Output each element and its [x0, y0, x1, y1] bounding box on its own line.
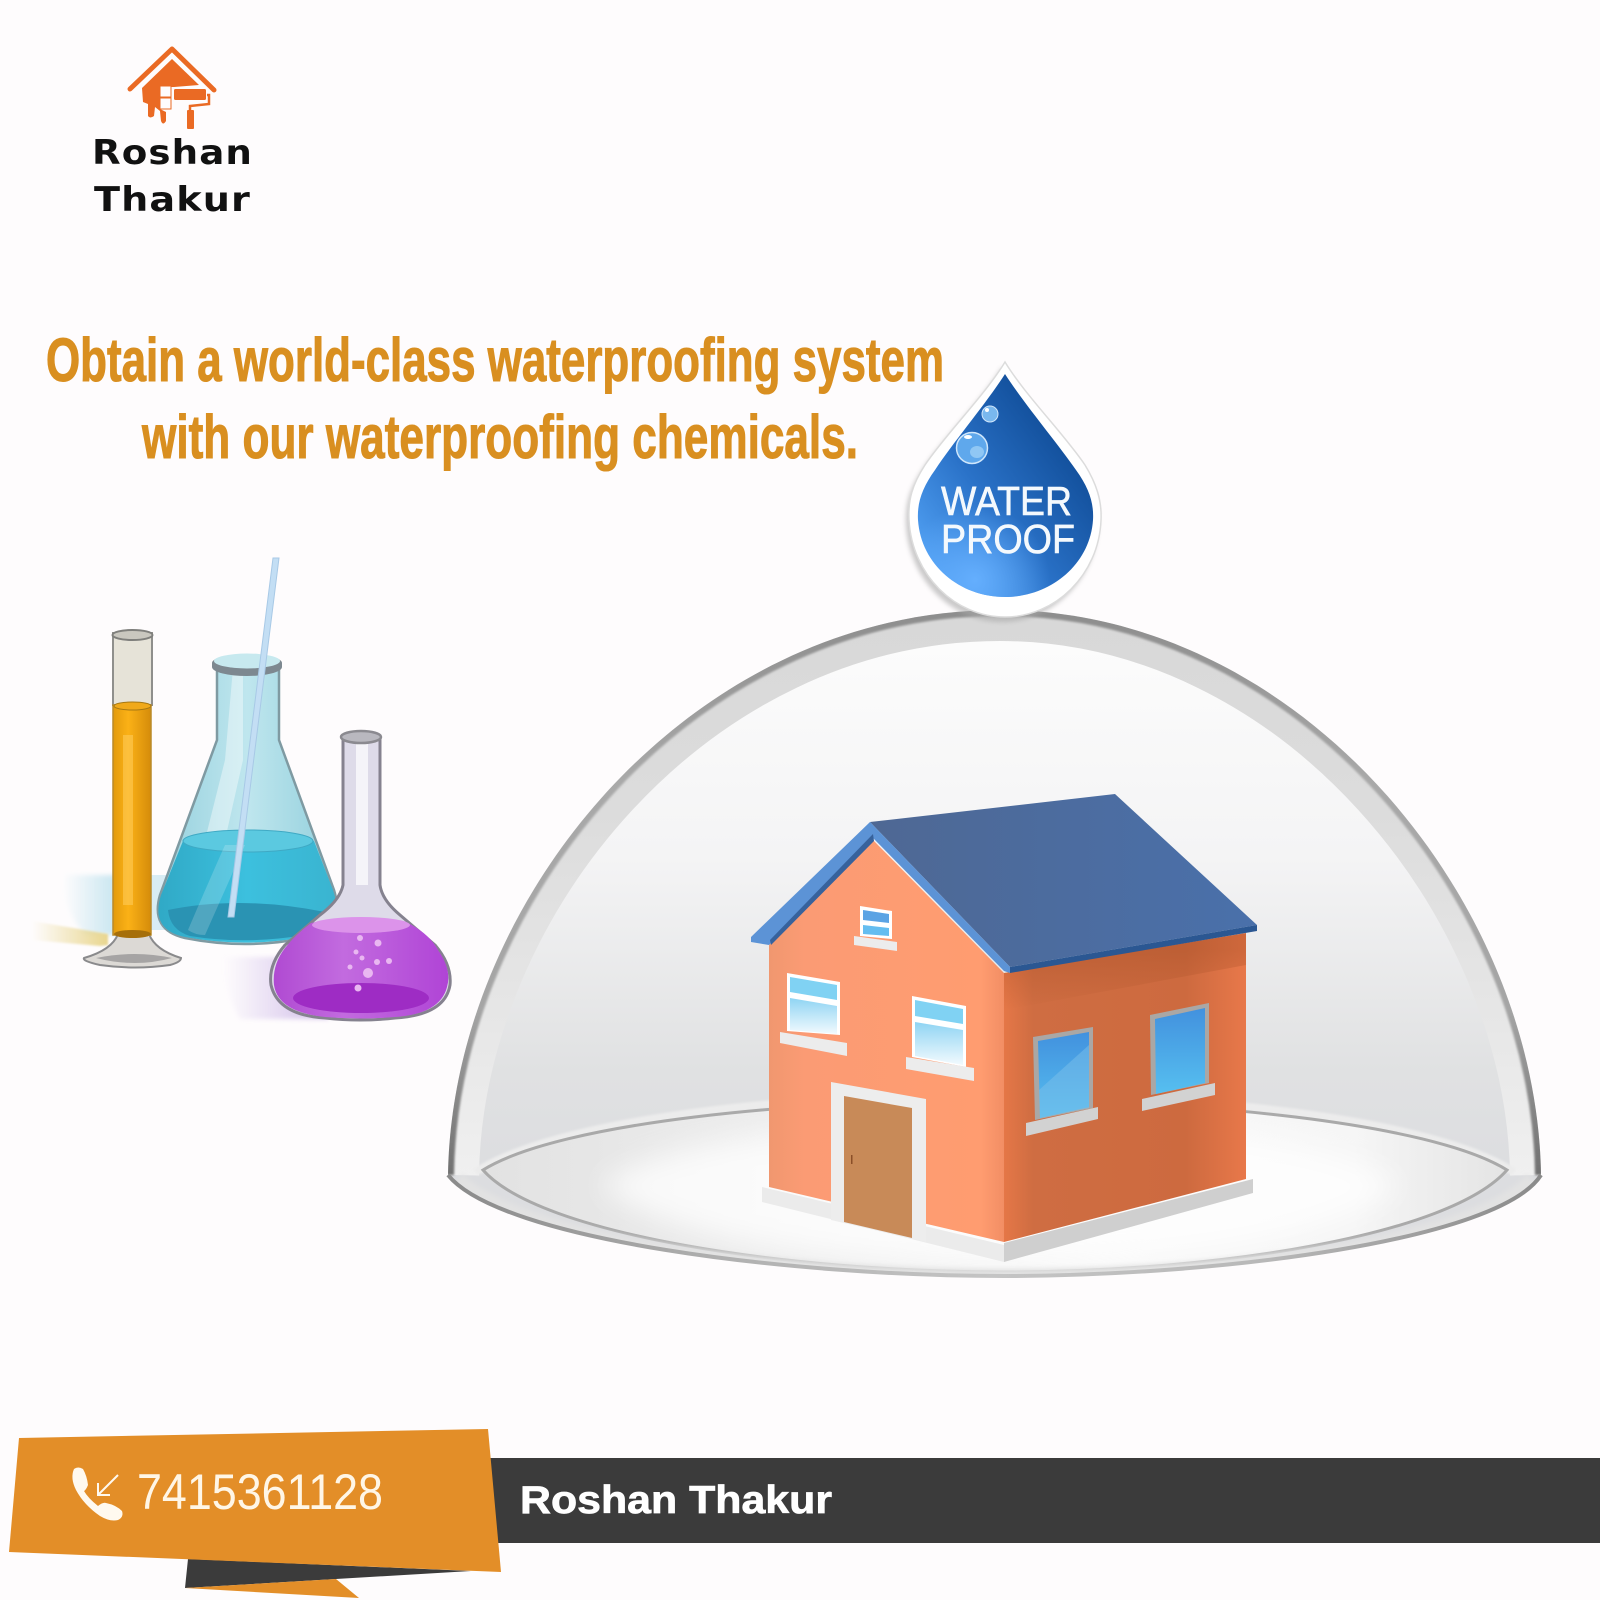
gable window	[854, 906, 897, 951]
door frame	[831, 1082, 926, 1242]
illustration: laboratory glassware	[32, 558, 450, 1020]
graduated cylinder with amber liquid	[84, 630, 181, 968]
roof	[751, 794, 1257, 973]
badge text line 2: PROOF	[941, 516, 1075, 562]
orange ribbon	[9, 1429, 501, 1572]
heading line 2: with our waterproofing chemicals.	[141, 403, 858, 471]
badge text line 1: WATER	[941, 478, 1072, 524]
side window far	[1142, 1003, 1215, 1111]
side wall	[1004, 933, 1246, 1242]
phone number: 7415361128	[137, 1464, 383, 1520]
large bubble	[956, 432, 988, 464]
heading	[46, 326, 944, 471]
drop blue body	[918, 374, 1093, 597]
dome body	[448, 610, 1541, 1276]
waterproof badge: water drop	[906, 362, 1101, 622]
drop white border	[909, 362, 1101, 617]
front window left	[780, 973, 847, 1056]
drop lower glow	[918, 374, 1093, 597]
logo: Roshan Thakur	[92, 49, 253, 220]
icon: house with paint roller	[130, 49, 214, 129]
glass dome	[448, 610, 1541, 1276]
heading line 1: Obtain a world-class waterproofing system	[46, 326, 944, 394]
front wall	[769, 840, 1004, 1242]
door	[844, 1096, 912, 1238]
glass stirring rod	[228, 558, 279, 917]
drop shadow	[906, 367, 1098, 622]
footer bar	[9, 1429, 1600, 1598]
front window right	[906, 996, 974, 1081]
door handle	[851, 1155, 852, 1164]
ribbon tail	[185, 1579, 359, 1598]
round flask with purple liquid	[271, 731, 450, 1020]
logo name line 1: Roshan	[92, 133, 253, 173]
name text: Roshan Thakur	[520, 1479, 832, 1522]
side window near	[1026, 1027, 1098, 1136]
dark name bar	[488, 1458, 1600, 1543]
coloured floor shadows	[32, 875, 330, 1019]
dome glass outline	[448, 610, 1541, 1175]
dome inner light band	[448, 610, 1541, 1175]
conical flask with blue liquid	[158, 654, 336, 944]
house plinth	[762, 1179, 1253, 1262]
ribbon dark fold	[185, 1559, 471, 1588]
icon: phone handset	[72, 1468, 122, 1520]
house	[751, 794, 1257, 1262]
small bubble	[982, 406, 998, 422]
dome floor	[479, 1101, 1510, 1270]
dome base outline	[448, 1175, 1541, 1276]
logo name line 2: Thakur	[94, 180, 251, 220]
